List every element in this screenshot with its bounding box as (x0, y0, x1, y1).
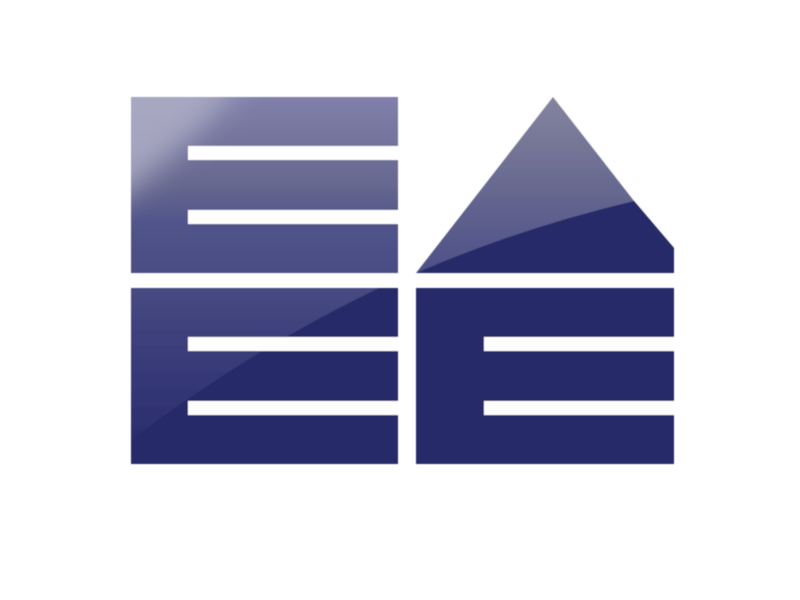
block: bottom left (131, 288, 403, 464)
block: bottom right (416, 288, 679, 464)
block: roof triangle (416, 97, 674, 273)
logo graphic (130, 96, 675, 465)
block: top left (130, 96, 399, 274)
